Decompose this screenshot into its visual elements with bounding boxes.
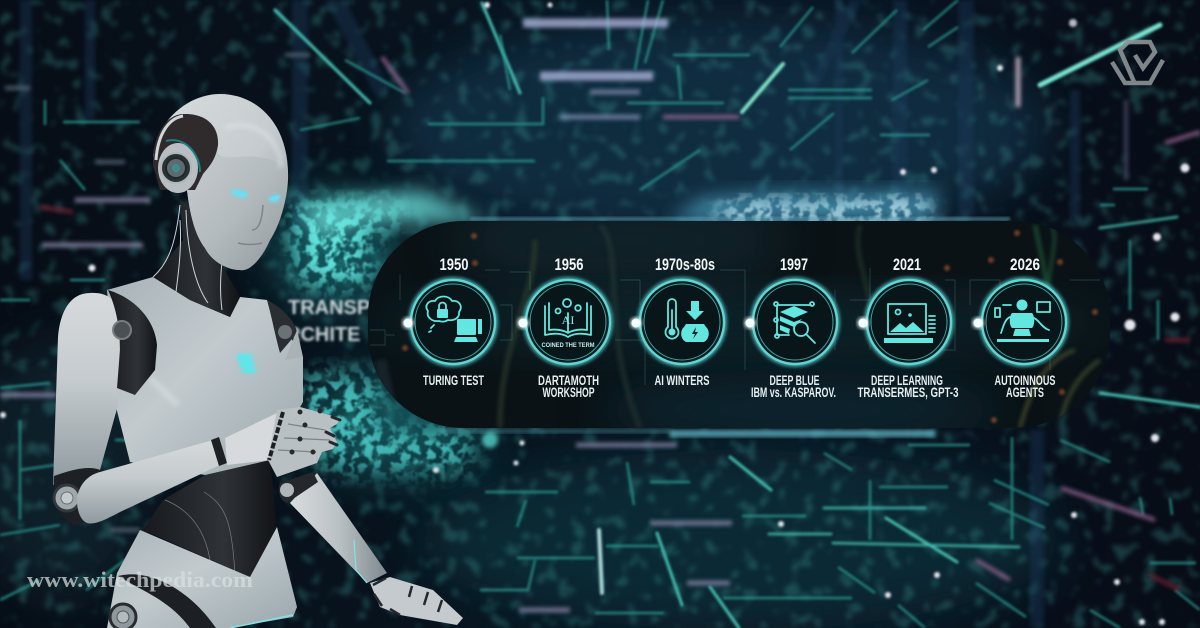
chest light xyxy=(238,355,255,372)
icon: brand logo xyxy=(1112,42,1163,84)
robot: torso xyxy=(107,277,303,475)
milestone: 2026 Autonomous Agents: AUTOINNOUS xyxy=(994,373,1056,388)
milestone: 1997 Deep Blue: 1997 xyxy=(780,256,808,274)
icon: open book with AI and gears: AI xyxy=(562,313,574,327)
milestone: 2021 Deep Learning: 2021 xyxy=(893,256,921,274)
icon: thought cloud, lock and computer xyxy=(426,296,482,342)
robot: elbow and forearm xyxy=(54,437,227,525)
milestone: 1970s-80s AI Winters: AI WINTERS xyxy=(654,373,710,388)
milestone: 1956 Dartmouth Workshop: WORKSHOP xyxy=(542,385,594,400)
icon: layered cube with magnifier xyxy=(774,302,815,343)
milestone: 2026 Autonomous Agents: AGENTS xyxy=(1006,385,1044,400)
icon: laptop with landscape picture xyxy=(884,304,935,343)
nose and lips xyxy=(238,205,263,244)
panel: timeline xyxy=(368,221,1110,428)
milestone: 2026 Autonomous Agents: 2026 xyxy=(1010,256,1040,274)
icon: open book with AI and gears: COINED THE TERM xyxy=(542,342,594,349)
milestone: 1950 Turing Test: 1950 xyxy=(440,256,468,274)
milestone: 1950 Turing Test xyxy=(404,256,495,388)
milestone: 1997 Deep Blue: IBM vs. KASPAROV. xyxy=(751,385,836,400)
milestone: 1950 Turing Test: TURING TEST xyxy=(423,373,485,388)
robot: head xyxy=(153,94,288,270)
milestone: 1997 Deep Blue: DEEP BLUE xyxy=(770,373,820,388)
milestone: 1956 Dartmouth Workshop: DARTAMOTH xyxy=(538,373,599,388)
cloud: teal particles left xyxy=(275,190,490,475)
milestone: 2021 Deep Learning: TRANSERMES, GPT-3 xyxy=(858,385,959,400)
ear disc xyxy=(158,140,200,193)
illustration: humanoid robot xyxy=(53,94,463,628)
milestone: 2021 Deep Learning: DEEP LEARNING xyxy=(871,373,943,388)
robot: rear lower arm and hand xyxy=(279,472,463,625)
blurred words behind panel: TRANSP xyxy=(288,297,370,319)
blurred words behind panel: RCHITE xyxy=(286,324,360,346)
eyes xyxy=(231,191,280,201)
milestone: 1970s-80s AI Winters: 1970s-80s xyxy=(655,256,715,274)
robot: front hand xyxy=(225,407,340,477)
icon: open book with AI and gears xyxy=(542,299,594,349)
robot: shoulders and upper arm xyxy=(53,290,303,485)
watermark: website address: www.witechpedia.com xyxy=(27,567,253,592)
milestone: 1956 Dartmouth Workshop: 1956 xyxy=(554,256,584,274)
cloud: bright blue-white top of panel xyxy=(440,190,1010,448)
bright teal lines xyxy=(275,3,1200,628)
milestone: 1956 Dartmouth Workshop xyxy=(518,256,610,400)
icon: robot agent with tools xyxy=(995,300,1050,342)
icon: thermometer, arrow and money bag xyxy=(666,299,709,342)
robot: neck xyxy=(153,200,240,317)
milestone: 1997 Deep Blue xyxy=(746,256,837,400)
milestone: 2021 Deep Learning xyxy=(858,256,959,400)
timeline line xyxy=(368,322,1109,324)
robot: hips and thigh xyxy=(107,460,297,628)
milestone: 2026 Autonomous Agents xyxy=(974,256,1066,400)
blurred words behind panel xyxy=(286,297,370,346)
milestone: 1970s-80s AI Winters xyxy=(632,256,724,388)
